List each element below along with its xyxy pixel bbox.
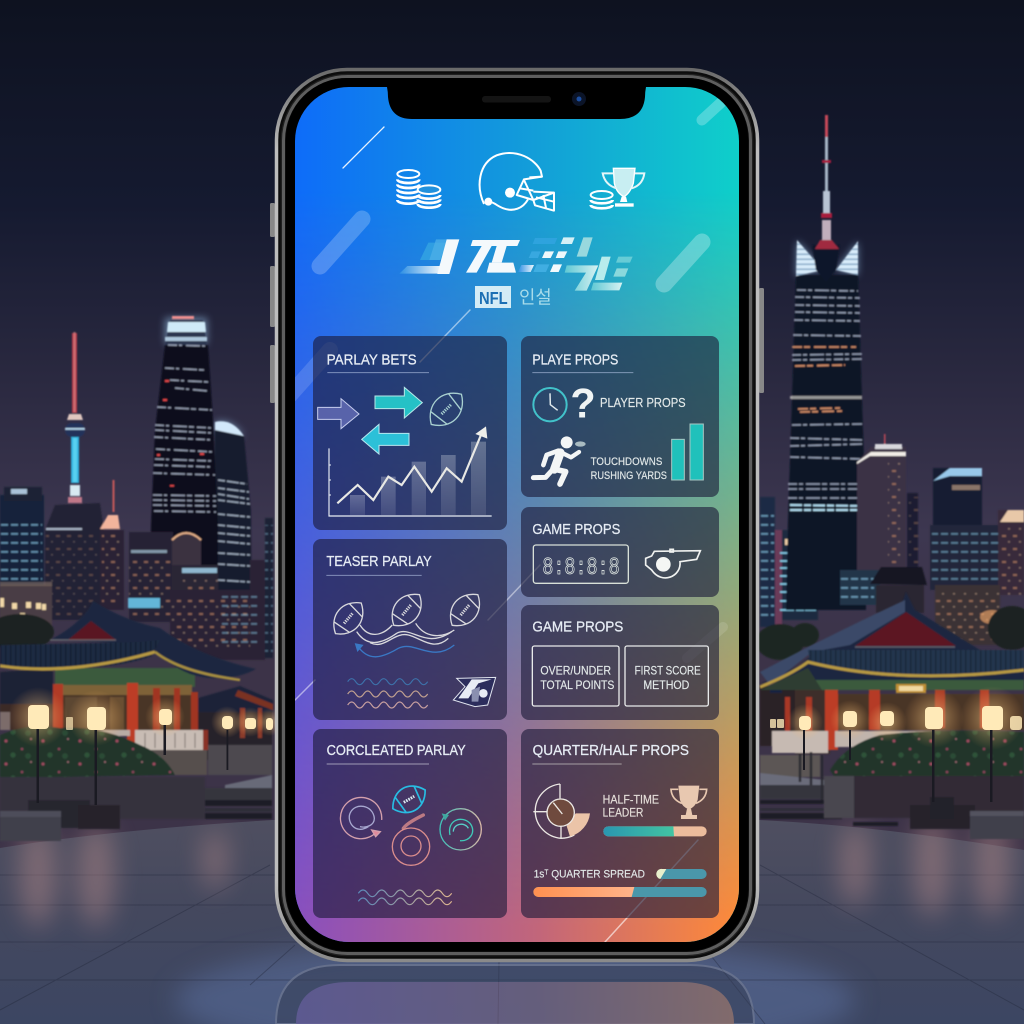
label: first quarter spread: 1s — [534, 869, 546, 881]
panel: quarter/half props — [521, 729, 719, 918]
blue return arrow — [356, 644, 454, 657]
panel: player props — [521, 336, 719, 497]
heading: TEASER PARLAY — [326, 554, 432, 570]
arrow: purple right — [318, 399, 359, 429]
label: half-time leader: HALF-TIME — [603, 792, 659, 806]
arrow: teal left — [362, 424, 409, 454]
panel: game props scoreboard — [521, 507, 719, 597]
camera — [572, 92, 586, 106]
phone reflection on floor — [276, 965, 754, 1024]
right hanok pavilion — [760, 592, 1024, 839]
icon: coin stacks — [397, 170, 440, 208]
icon: football helmet — [480, 153, 554, 211]
heading: CORCLEATED PARLAY — [327, 743, 466, 759]
header content — [397, 153, 644, 308]
scoreboard — [533, 545, 628, 583]
label: half-time leader: LEADER — [603, 806, 644, 820]
progress bar: spread large — [533, 887, 707, 897]
progress bar: spread small — [656, 869, 707, 879]
icon: blue football — [387, 779, 431, 819]
screen decoration: capsules and light streaks — [290, 98, 726, 942]
heading: GAME PROPS — [532, 522, 621, 538]
label: first quarter spread: T — [544, 867, 549, 876]
heading: GAME PROPS — [532, 620, 624, 636]
left hanok pavilion — [0, 601, 273, 841]
tower glows — [165, 240, 858, 436]
stat labels: RUSHING YARDS — [591, 470, 667, 482]
icon: football — [422, 385, 471, 434]
box: over/under: OVER/UNDER — [540, 664, 611, 677]
spiral left — [340, 797, 382, 839]
stat labels: TOUCHDOWNS — [591, 456, 662, 468]
right skyline: towers and office buildings — [756, 115, 1024, 660]
panel: teaser parlay — [313, 539, 507, 720]
screen gradient — [295, 87, 739, 942]
decorative waves — [348, 679, 428, 708]
phone screen — [290, 87, 739, 942]
floor — [0, 813, 1024, 1024]
linked footballs — [326, 587, 487, 644]
label: PLAYER PROPS — [600, 396, 686, 410]
icon: tan trophy — [671, 786, 707, 819]
loop — [392, 815, 430, 865]
line and bar chart — [329, 426, 492, 516]
progress bar: half-time — [603, 826, 707, 836]
left lanterns — [8, 687, 284, 805]
heading: PARLAY BETS — [327, 352, 417, 368]
icon: trophy and coins — [591, 168, 644, 208]
icon: quarter gauge — [533, 784, 590, 838]
box: first score: FIRST SCORE — [635, 664, 701, 677]
box: first score: METHOD — [643, 679, 689, 692]
panel: game props over/under — [521, 605, 719, 720]
icon: team badge — [453, 677, 496, 707]
heading: PLAYE PROPS — [532, 352, 619, 368]
Namsan tower — [65, 332, 85, 503]
left skyline: Seoul towers — [0, 316, 273, 660]
arrow: teal right — [375, 387, 422, 418]
bar chart — [672, 424, 703, 480]
phone notch — [387, 87, 646, 119]
box: over/under: TOTAL POINTS — [540, 679, 615, 692]
side buttons — [270, 203, 764, 403]
icon: question mark: ? — [570, 381, 596, 427]
panel: parlay bets — [313, 336, 507, 530]
icon: running player — [533, 436, 586, 484]
icon: whistle — [646, 549, 700, 578]
title logo: stylised slanted bars — [399, 237, 633, 291]
phone body — [275, 68, 759, 962]
box: first score — [625, 646, 708, 706]
decorative waves — [358, 890, 452, 905]
NFL badge: NFL — [479, 288, 508, 308]
speaker — [482, 96, 551, 102]
box: over/under — [532, 646, 619, 706]
stat labels — [591, 456, 667, 482]
subtitle: 인설 — [519, 288, 552, 308]
icon: clock — [533, 388, 567, 421]
scoreboard: 8:8:8:8 — [542, 555, 620, 582]
panel: correlated parlay — [313, 729, 507, 918]
spiral right — [440, 809, 481, 850]
label: half-time leader — [603, 792, 659, 820]
heading: QUARTER/HALF PROPS — [533, 743, 689, 759]
label: first quarter spread: QUARTER SPREAD — [548, 869, 645, 881]
right lanterns — [770, 686, 1024, 802]
